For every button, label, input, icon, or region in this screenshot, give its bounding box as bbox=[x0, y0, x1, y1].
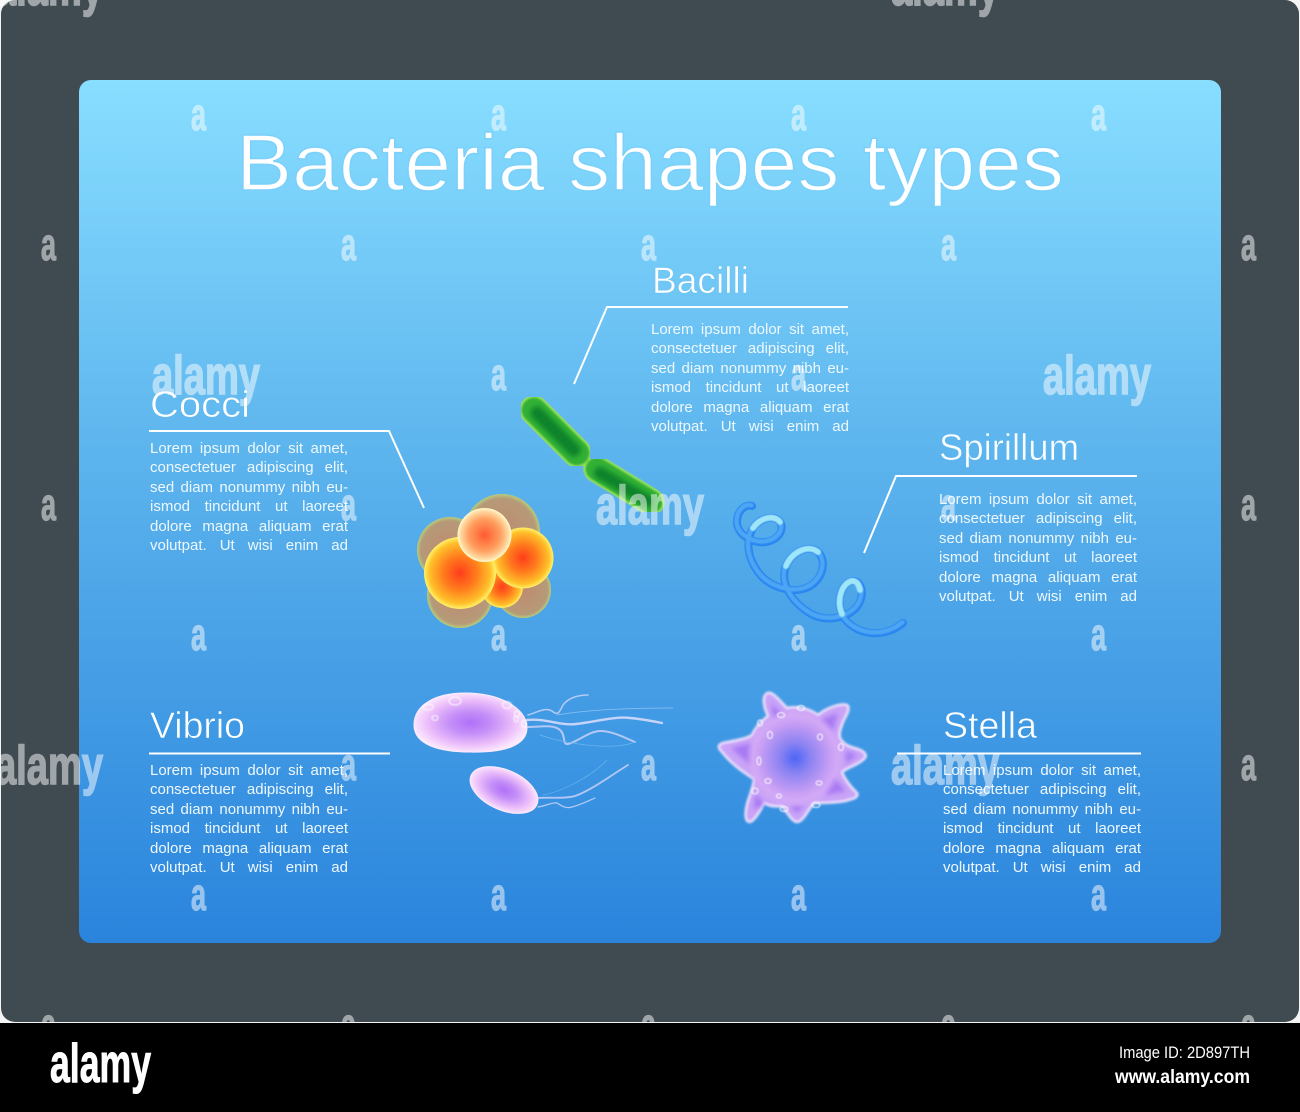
watermark overlay: a bbox=[1091, 869, 1107, 920]
text block: Stella: dolore magna aliquam erat bbox=[943, 840, 1141, 856]
heading: Cocci: Cocci bbox=[150, 384, 250, 425]
text block: Spirillum: consectetuer adipiscing elit, bbox=[939, 510, 1137, 527]
watermark overlay: alamy bbox=[1043, 344, 1151, 406]
text block: Cocci: sed diam nonummy nibh eu- bbox=[150, 478, 348, 496]
leader line: Cocci bbox=[149, 431, 424, 508]
leader line: Vibrio bbox=[149, 752, 390, 754]
footer: image id: Image ID: 2D897TH bbox=[1119, 1043, 1250, 1062]
watermark overlay: a bbox=[491, 609, 507, 660]
text block: Bacilli: sed diam nonummy nibh eu- bbox=[651, 360, 849, 376]
watermark overlay: a bbox=[491, 89, 507, 140]
watermark overlay: a bbox=[41, 219, 57, 270]
watermark overlay: a bbox=[941, 219, 957, 270]
spike shading bbox=[731, 703, 857, 813]
text block: Vibrio: dolore magna aliquam erat bbox=[150, 840, 348, 856]
illustration: Cocci cluster bbox=[417, 494, 554, 628]
body: small cell bbox=[463, 757, 545, 823]
watermark overlay: a bbox=[341, 479, 357, 530]
text block: Vibrio bbox=[150, 762, 348, 876]
watermark overlay: a bbox=[1241, 219, 1257, 270]
text block: Cocci: ismod tincidunt ut laoreet bbox=[150, 498, 348, 515]
watermark overlay: a bbox=[1241, 479, 1257, 530]
text block: Bacilli bbox=[651, 320, 849, 435]
text block: Vibrio: ismod tincidunt ut laoreet bbox=[150, 820, 348, 837]
gradient panel bbox=[79, 80, 1221, 943]
surface rings bbox=[752, 706, 844, 812]
leader line: Stella bbox=[897, 752, 1141, 754]
watermark overlay: a bbox=[491, 869, 507, 920]
text block: Cocci: volutpat. Ut wisi enim ad bbox=[150, 537, 348, 554]
text block: Bacilli: consectetuer adipiscing elit, bbox=[651, 340, 849, 357]
text block: Cocci: dolore magna aliquam erat bbox=[150, 518, 348, 534]
watermark overlay: a bbox=[341, 219, 357, 270]
watermark overlay: a bbox=[641, 739, 657, 790]
illustration: Bacilli rods bbox=[534, 410, 651, 502]
illustration: Stella star cell bbox=[719, 693, 866, 822]
body: large cell bbox=[414, 693, 527, 752]
watermark overlay: a bbox=[491, 349, 507, 400]
watermark overlay: a bbox=[1091, 89, 1107, 140]
text block: Stella: volutpat. Ut wisi enim ad bbox=[943, 859, 1141, 876]
text block: Spirillum: volutpat. Ut wisi enim ad bbox=[939, 588, 1137, 605]
text block: Bacilli: Lorem ipsum dolor sit amet, bbox=[651, 320, 849, 338]
text block: Stella: ismod tincidunt ut laoreet bbox=[943, 820, 1141, 837]
text block: Cocci: consectetuer adipiscing elit, bbox=[150, 459, 348, 476]
heading: Bacilli: Bacilli bbox=[652, 260, 749, 301]
text block: Vibrio: volutpat. Ut wisi enim ad bbox=[150, 859, 348, 876]
text block: Spirillum: dolore magna aliquam erat bbox=[939, 568, 1137, 586]
text block: Spirillum bbox=[939, 490, 1137, 605]
text block: Stella: consectetuer adipiscing elit, bbox=[943, 781, 1141, 798]
heading: Stella: Stella bbox=[943, 705, 1037, 746]
flagella: small cell bbox=[538, 760, 628, 808]
leader line: Bacilli bbox=[574, 307, 848, 384]
text block: Spirillum: Lorem ipsum dolor sit amet, bbox=[939, 490, 1137, 508]
watermark overlay: a bbox=[191, 89, 207, 140]
watermark overlay: a bbox=[941, 479, 957, 530]
footer: website: www.alamy.com bbox=[1114, 1067, 1250, 1088]
heading: Spirillum: Spirillum bbox=[939, 427, 1079, 468]
text block: Cocci bbox=[150, 440, 348, 554]
title: Bacteria shapes types bbox=[236, 118, 1064, 207]
text block: Bacilli: dolore magna aliquam erat bbox=[651, 398, 849, 416]
illustration: Spirillum spiral bbox=[736, 505, 903, 633]
watermark overlay: a bbox=[1241, 739, 1257, 790]
text block: Cocci: Lorem ipsum dolor sit amet, bbox=[150, 440, 348, 456]
leader line: Spirillum bbox=[864, 476, 1137, 553]
watermark overlay: a bbox=[1091, 609, 1107, 660]
surface rings bbox=[423, 697, 526, 728]
text block: Vibrio: Lorem ipsum dolor sit amet, bbox=[150, 762, 348, 778]
watermark overlay: a bbox=[341, 739, 357, 790]
watermark overlay: a bbox=[791, 869, 807, 920]
footer: alamy logo: alamy bbox=[50, 1032, 151, 1094]
text block: Stella: sed diam nonummy nibh eu- bbox=[943, 800, 1141, 818]
watermark overlay: a bbox=[191, 869, 207, 920]
watermark overlay: a bbox=[791, 609, 807, 660]
text block: Stella: Lorem ipsum dolor sit amet, bbox=[943, 762, 1141, 778]
watermark overlay: a bbox=[41, 479, 57, 530]
watermark overlay: a bbox=[191, 609, 207, 660]
watermark overlay: a bbox=[791, 89, 807, 140]
text block: Bacilli: volutpat. Ut wisi enim ad bbox=[651, 418, 849, 435]
flagella: large cell bbox=[527, 695, 673, 746]
round body bbox=[745, 708, 845, 808]
heading: Vibrio: Vibrio bbox=[150, 705, 245, 746]
watermark overlay: a bbox=[791, 349, 807, 400]
text block: Spirillum: sed diam nonummy nibh eu- bbox=[939, 530, 1137, 546]
text block: Bacilli: ismod tincidunt ut laoreet bbox=[651, 379, 849, 396]
text block: Vibrio: consectetuer adipiscing elit, bbox=[150, 781, 348, 798]
text block: Spirillum: ismod tincidunt ut laoreet bbox=[939, 549, 1137, 566]
watermark overlay: alamy bbox=[152, 344, 260, 406]
watermark overlay: a bbox=[641, 219, 657, 270]
watermark overlay: alamy bbox=[891, 734, 999, 796]
illustration: Vibrio bacteria bbox=[414, 693, 673, 823]
watermark overlay: alamy bbox=[596, 474, 704, 536]
text block: Stella bbox=[943, 762, 1141, 876]
text block: Vibrio: sed diam nonummy nibh eu- bbox=[150, 800, 348, 818]
